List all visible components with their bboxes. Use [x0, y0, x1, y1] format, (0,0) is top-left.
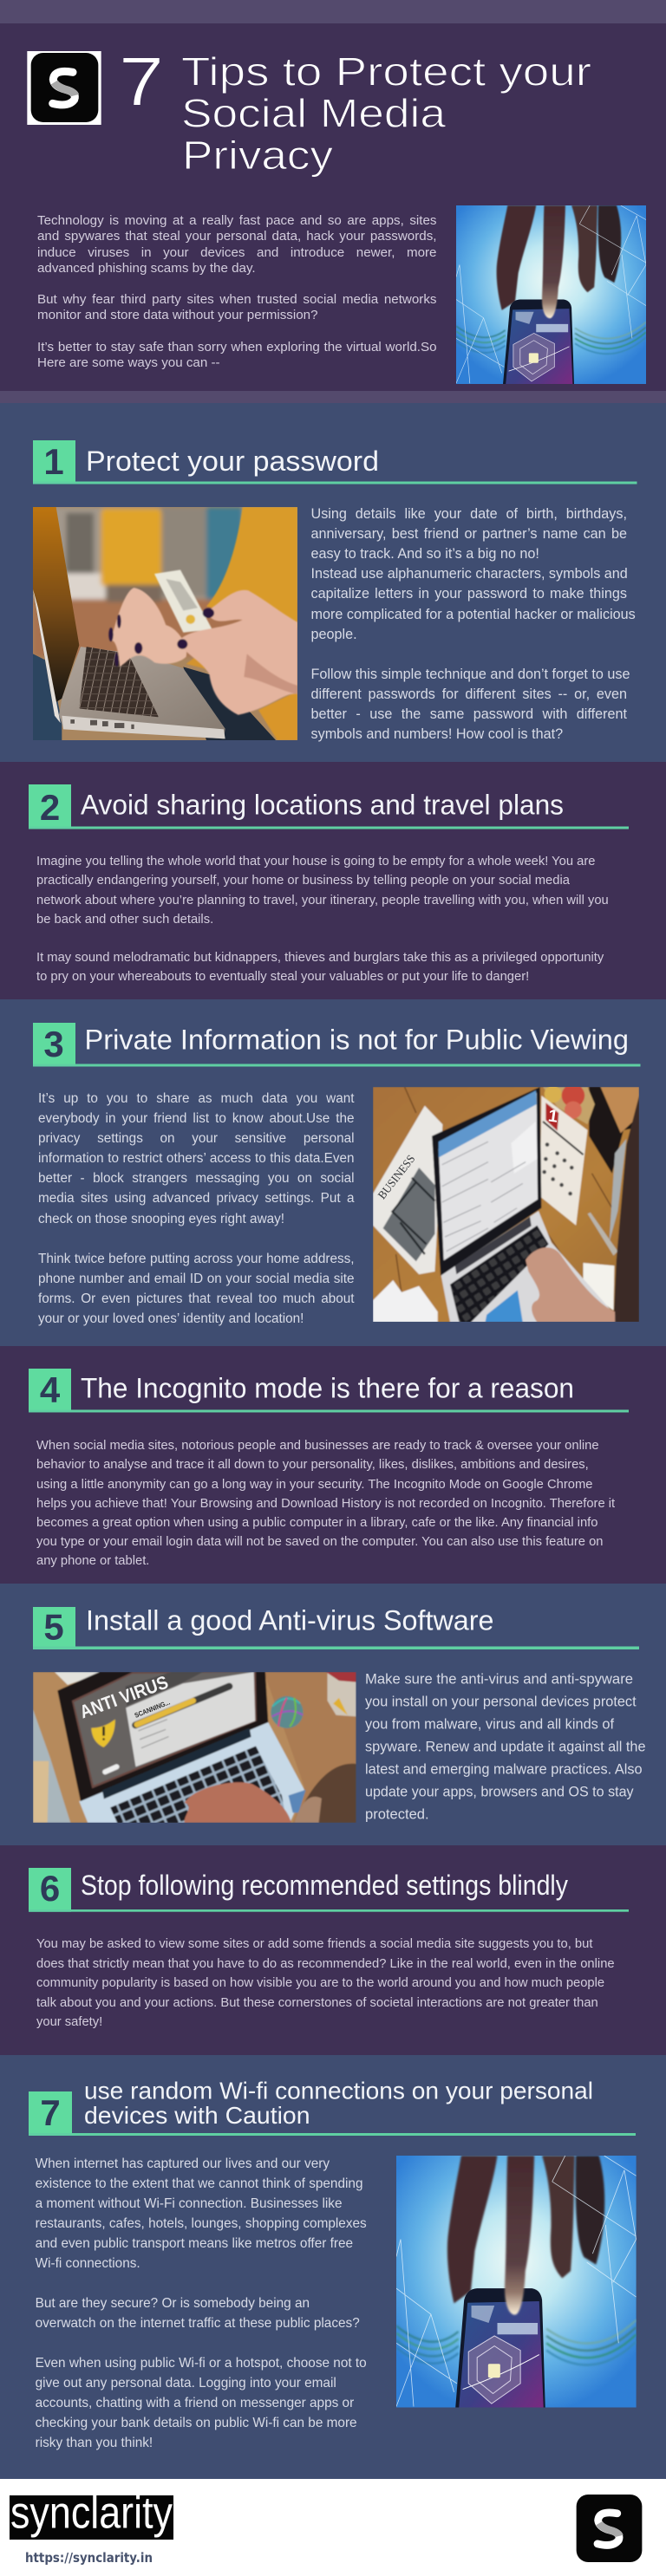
text block: password advice: Using details like your date of birth, birthdays,	[310, 506, 627, 522]
heading: tip 7: use random Wi-fi connections on your personal	[84, 2077, 593, 2104]
text block: wi-fi advice: restaurants, cafes, hotels, lounges, shopping complexes	[36, 2216, 367, 2231]
text block: introduction: advanced phishing scams by the day.	[37, 261, 256, 276]
text block: wi-fi advice: existence to the extent that we cannot think of spending	[36, 2176, 362, 2191]
text block: anti-virus advice: spyware. Renew and update it against all the	[365, 1739, 645, 1754]
text block: locations advice: Imagine you telling the whole world that your house is going to be empty for a whole week! You are	[36, 855, 595, 868]
text block: introduction: Here are some ways you can --	[37, 355, 220, 370]
image: finger touching phone	[396, 2156, 637, 2408]
title: Social Media	[181, 91, 446, 136]
heading: tip 2	[29, 784, 629, 829]
text block: anti-virus advice: Make sure the anti-virus and anti-spyware	[365, 1671, 633, 1687]
text block: password advice: easy to track. And so it’s a big no no!	[310, 546, 539, 562]
heading: tip 2: 2	[40, 787, 60, 828]
text block: password advice: Follow this simple technique and don’t forget to use	[310, 667, 630, 682]
text block: introduction: induce viruses in your devices and introduce newer, more	[37, 245, 437, 260]
text block: locations advice: practically endangering yourself, your home or business by telling people on your social media	[36, 874, 570, 888]
text block: wi-fi advice: When internet has captured our lives and our very	[36, 2156, 330, 2171]
text block: private information advice: privacy settings on your sensitive personal	[38, 1131, 354, 1146]
text block: introduction: But why fear third party sites when trusted social media networks	[37, 292, 437, 307]
text block: wi-fi advice: accounts, chatting with a friend on messenger apps or	[36, 2396, 354, 2410]
text block: locations advice	[36, 855, 609, 984]
text block: wi-fi advice: risky than you think!	[36, 2436, 153, 2450]
text block: incognito advice: When social media sites, notorious people and businesses are ready to track & oversee your online	[36, 1439, 599, 1453]
text block: password advice: anniversary, best friend or partner’s name can be	[310, 526, 627, 542]
text block: anti-virus advice: latest and emerging malware practices. Also	[365, 1761, 643, 1777]
text block: private information advice: everybody in your friend list to know about.Use the	[38, 1111, 354, 1126]
text block: introduction: monitor and store data without your permission?	[37, 308, 317, 322]
title: 7	[119, 43, 164, 120]
icon: S logo	[27, 51, 101, 125]
title	[119, 43, 591, 178]
text block: private information advice: your or your loved ones’ identity and location!	[38, 1311, 304, 1326]
heading: tip 4: 4	[40, 1369, 61, 1410]
text block: incognito advice: any phone or tablet.	[36, 1554, 149, 1568]
text block: password advice: better - use the same password with different	[310, 706, 627, 722]
text block: private information advice: phone number and email ID on your social media site	[38, 1272, 354, 1286]
panel: tip 7 wi-fi caution	[0, 2055, 666, 2479]
text block: password advice: symbols and numbers! How cool is that?	[310, 726, 563, 742]
text block: password advice: people.	[310, 627, 357, 642]
panel: intro	[0, 0, 666, 403]
title: Tips to Protect your	[181, 49, 591, 94]
heading: tip 7: devices with Caution	[84, 2102, 310, 2129]
text block: incognito advice: helps you achieve that! Your Browsing and Download History is not recorded on Incognito. Therefore it	[36, 1497, 615, 1511]
text block: incognito advice: becomes a great option when using a public computer in a library, cafe or the like. Any financial info	[36, 1516, 597, 1530]
text block: recommended settings advice: talk about you and your actions. But these cornerstones of societal interactions are not greater than	[36, 1996, 598, 2010]
text block: private information advice	[38, 1091, 354, 1326]
text block: locations advice: be back and other such details.	[36, 913, 213, 927]
text block: recommended settings advice: community popularity is based on how visible you are to the world around you and how much people	[36, 1976, 604, 1990]
image: laptop with form and newspaper on desk	[373, 1087, 639, 1322]
text block: private information advice: forms. Or even pictures that reveal too much about	[38, 1291, 354, 1306]
text block: locations advice: to pry on your whereabouts to eventually steal your valuables or put your life to danger!	[36, 970, 529, 984]
text block: private information advice: It’s up to you to share as much data you want	[38, 1091, 354, 1106]
text block: recommended settings advice	[36, 1937, 615, 2029]
image: hands with credit card at laptop	[33, 507, 297, 740]
heading: tip 7: 7	[40, 2092, 61, 2133]
text block: wi-fi advice: and even public transport means like metros offer free	[36, 2236, 353, 2251]
panel: tip 3 private information	[0, 999, 666, 1346]
heading: tip 1: Protect your password	[86, 446, 379, 477]
heading: tip 6: 6	[40, 1868, 60, 1909]
text block: introduction: It’s better to stay safe than sorry when exploring the virtual world.So	[37, 340, 437, 355]
title: Privacy	[182, 133, 333, 178]
text block: incognito advice: you type or your email login data will not be saved on the computer. You can also use this feature on	[36, 1535, 604, 1549]
text block: anti-virus advice: protected.	[365, 1806, 429, 1822]
text block: recommended settings advice: You may be asked to view some sites or add some friends a social media site suggests you to, but	[36, 1937, 592, 1951]
heading: tip 2: Avoid sharing locations and travel plans	[81, 790, 564, 821]
text block: wi-fi advice: Wi-fi connections.	[36, 2256, 140, 2271]
text block: wi-fi advice: But are they secure? Or is somebody being an	[36, 2296, 310, 2311]
text block: wi-fi advice	[35, 2156, 367, 2450]
heading: tip 6: Stop following recommended settings blindly	[81, 1870, 568, 1901]
image: laptop with form and newspaper on desk: BUSINESS	[375, 1152, 417, 1201]
image: finger touching phone	[456, 205, 646, 384]
text block: wi-fi advice: checking your bank details on public Wi-fi can be more	[36, 2416, 357, 2430]
text block: private information advice: media sites using advanced privacy settings. Put a	[38, 1191, 354, 1206]
text block: wi-fi advice: give out any personal data. Logging into your email	[36, 2376, 336, 2391]
image: laptop running anti virus scan: SCANNING...	[134, 1698, 171, 1720]
heading: tip 4: The Incognito mode is there for a reason	[81, 1372, 574, 1403]
text block: private information advice: information to restrict others’ access to this data.Even	[38, 1151, 354, 1166]
text block: incognito advice	[36, 1439, 615, 1568]
panel: tip 2 avoid sharing locations	[0, 762, 666, 999]
panel: footer	[0, 2479, 666, 2576]
text block: recommended settings advice: your safety!	[36, 2015, 102, 2029]
heading: tip 7	[29, 2077, 636, 2136]
text block: introduction	[37, 213, 437, 370]
text block: password advice	[310, 506, 636, 742]
heading: tip 6	[29, 1868, 629, 1912]
text block: password advice: more complicated for a potential hacker or malicious	[310, 607, 636, 622]
text block: anti-virus advice: you from malware, virus and all kinds of	[365, 1716, 614, 1732]
text block: introduction: and spywares that steal your personal data, hack your passwords,	[37, 229, 437, 244]
heading: tip 3: Private Information is not for Public Viewing	[85, 1025, 629, 1056]
text block: anti-virus advice: you install on your personal devices protect	[365, 1694, 637, 1709]
heading: tip 1	[33, 440, 637, 484]
text block: anti-virus advice: update your apps, browsers and OS to stay	[365, 1784, 634, 1799]
text block: password advice: Instead use alphanumeric characters, symbols and	[310, 566, 628, 582]
heading: tip 4	[29, 1369, 629, 1413]
text block: private information advice: check on those snooping eyes right away!	[38, 1212, 284, 1226]
panel: tip 5 anti-virus	[0, 1584, 666, 1845]
text block: incognito advice: behavior to analyse and trace it all down to your personality, likes, dislikes, ambitions and desires,	[36, 1458, 589, 1472]
text block: wi-fi advice: Even when using public Wi-fi or a hotspot, choose not to	[36, 2356, 367, 2371]
heading: tip 5: 5	[43, 1607, 64, 1647]
text block: wi-fi advice: overwatch on the internet traffic at these public places?	[36, 2316, 360, 2331]
text block: password advice: capitalize letters in your password to make things	[310, 586, 627, 602]
icon: S logo	[576, 2495, 642, 2562]
text block: locations advice: network about where you’re planning to travel, your itinerary, people travelling with you, when will you	[36, 894, 609, 907]
panel: tip 4 incognito mode	[0, 1346, 666, 1584]
text block: wi-fi advice: a moment without Wi-Fi connection. Businesses like	[36, 2196, 342, 2211]
panel: tip 1 protect your password	[0, 403, 666, 762]
image: laptop running anti virus scan	[33, 1672, 356, 1823]
text block: locations advice: It may sound melodramatic but kidnappers, thieves and burglars take this as a privileged opportunity	[36, 951, 604, 965]
text block: anti-virus advice	[365, 1671, 645, 1822]
text block: password advice: different passwords for different sites -- or, even	[310, 686, 627, 702]
heading: tip 1: 1	[43, 441, 64, 482]
heading: tip 3: 3	[43, 1024, 64, 1064]
panel: tip 6 recommended settings	[0, 1845, 666, 2055]
text block: private information advice: better - block strangers messaging you on social	[38, 1171, 354, 1186]
text block: introduction: Technology is moving at a really fast pace and so are apps, sites	[37, 213, 437, 228]
text block: private information advice: Think twice before putting across your home address,	[38, 1252, 354, 1266]
text block: incognito advice: using a little anonymity can go a long way in your security. The Incognito Mode on Google Chrome	[36, 1478, 592, 1492]
image: laptop with form and newspaper on desk: 1	[546, 1106, 558, 1126]
heading: tip 5	[33, 1607, 639, 1649]
heading: tip 3	[33, 1023, 640, 1066]
text block: recommended settings advice: does that strictly mean that you have to do as recommended? Like in the real world, even in the online	[36, 1957, 615, 1971]
